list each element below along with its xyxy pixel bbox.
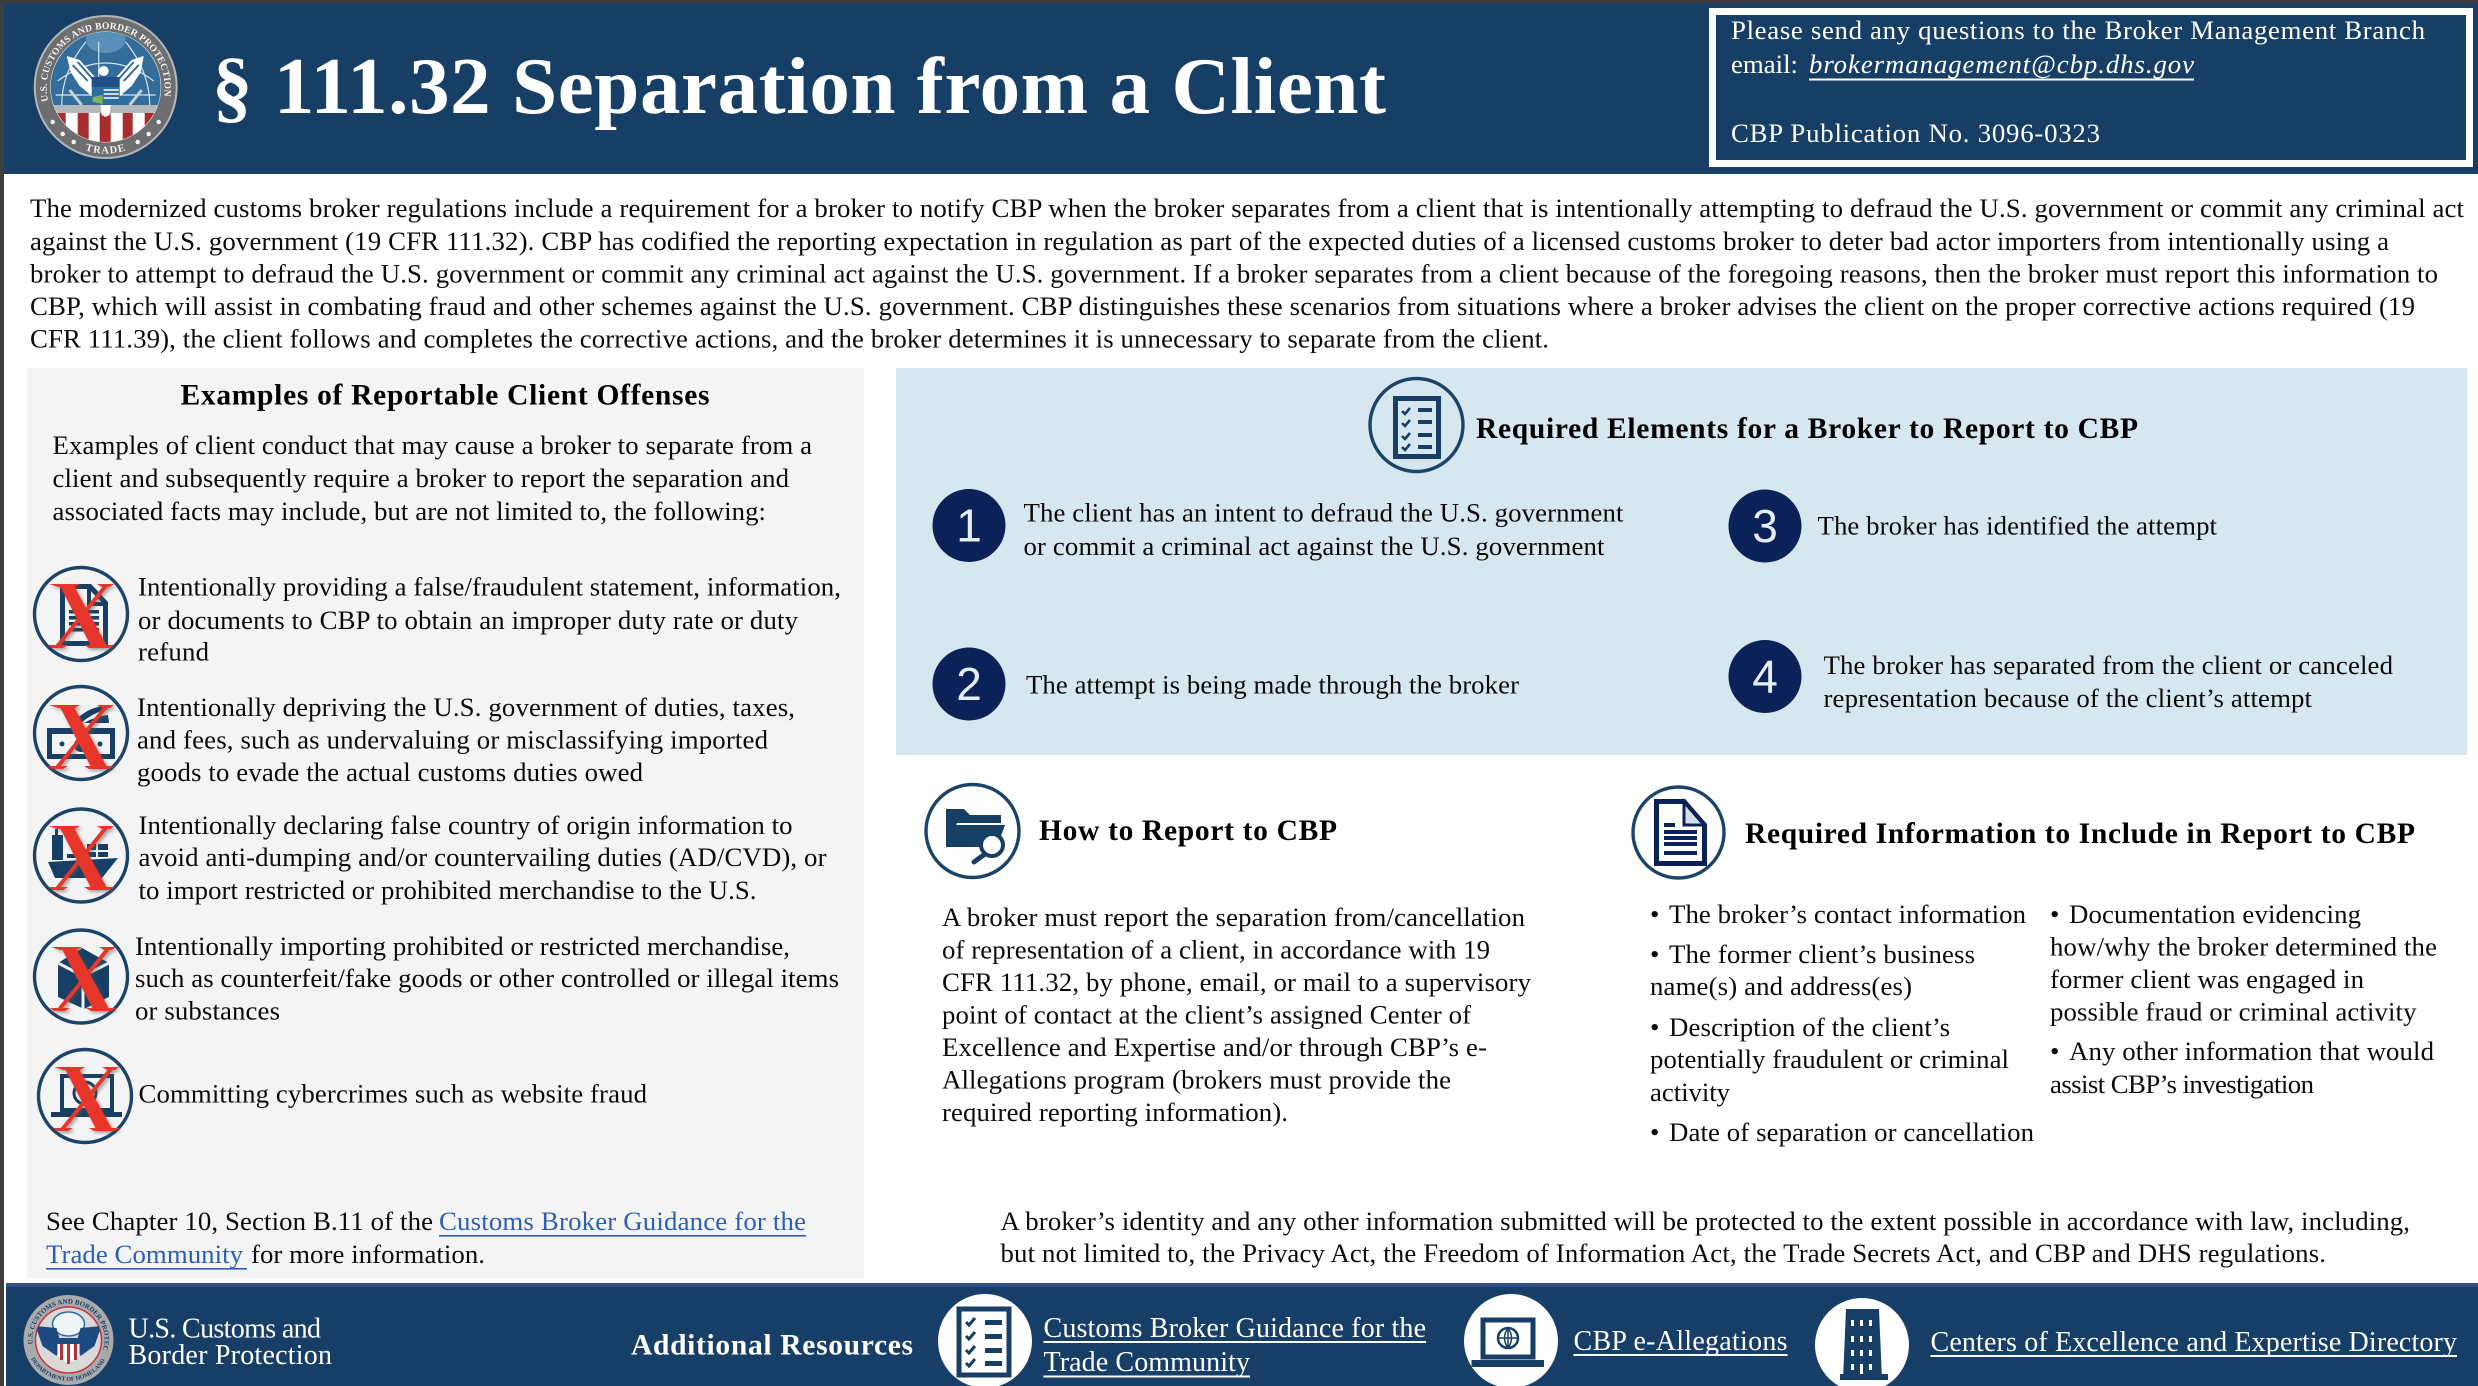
intro text: examples: client and subsequently require a broker to report the separation and (52, 463, 790, 493)
text: false statement: refund (138, 636, 210, 666)
text: depriving duties (137, 692, 795, 787)
text: prohibited merchandise (135, 931, 839, 1026)
text: false origin (138, 810, 827, 905)
element 2 text: The attempt is being made through the broker (1026, 670, 1519, 700)
contact box: brokermanagement@cbp.dhs.gov (1809, 49, 2194, 79)
element 1 text: The client has an intent to defraud the U.S. government (1024, 498, 1624, 528)
note: see chapter 10: Customs Broker Guidance for the (439, 1206, 806, 1236)
text: false statement (138, 572, 841, 666)
agency name (128, 1314, 332, 1371)
link: customs broker guidance: Trade Community (1044, 1347, 1250, 1378)
title: § 111.32 Separation from a Client (212, 41, 1386, 131)
intro text: examples (52, 430, 812, 526)
link: customs broker guidance: Customs Broker Guidance for the (1044, 1313, 1426, 1344)
list: column one: • (1650, 899, 1659, 929)
element 4 text: representation because of the client’s attempt (1824, 683, 2313, 713)
icon: checklist (1370, 378, 1463, 472)
icon: document (1633, 787, 1724, 878)
contact box: CBP Publication No. 3096-0323 (1731, 118, 2100, 148)
note: see chapter 10 (46, 1206, 806, 1270)
element 3 text: The broker has identified the attempt (1818, 510, 2218, 540)
icon: money crossed out (34, 686, 128, 780)
text: prohibited merchandise: or substances (135, 996, 280, 1026)
intro paragraph: broker to attempt to defraud the U.S. government or commit any criminal act against the U.S. government. If a broker separates from a client because of the foregoing reasons, then the broker must report this information to (30, 258, 2438, 288)
list: column one: • (1650, 1012, 1659, 1042)
link: centers of excellence: Centers of Excellence and Expertise Directory (1930, 1327, 2457, 1358)
heading: how to report: How to Report to CBP (1039, 815, 1337, 847)
privacy note: but not limited to, the Privacy Act, the Freedom of Information Act, the Trade Secrets Act, and CBP and DHS regulations. (1000, 1238, 2326, 1268)
paragraph: how to report: CFR 111.32, by phone, email, or mail to a supervisory (942, 967, 1532, 997)
note: see chapter 10: See Chapter 10, Section B.11 of the (46, 1206, 433, 1236)
number 1: 1 (956, 500, 982, 552)
list: column one: Description of the client’s (1669, 1012, 1950, 1042)
number 2 (932, 648, 1006, 720)
heading: required information: Required Information to Include in Report to CBP (1745, 818, 2415, 850)
text: cybercrimes: Committing cybercrimes such as website fraud (138, 1078, 648, 1108)
number 1 (932, 489, 1006, 562)
icon: checklist white (938, 1294, 1032, 1386)
seal ring text: DEPARTMENT OF HOMELAND SECURITY (31, 1356, 104, 1381)
heading: required elements: Required Elements for a Broker to Report to CBP (1476, 413, 2138, 445)
list: column two: how/why the broker determined the (2050, 932, 2437, 962)
element 1 text: or commit a criminal act against the U.S. government (1024, 531, 1605, 561)
list: column one (1650, 899, 2034, 1147)
intro paragraph (30, 193, 2465, 354)
paragraph: how to report: required reporting information). (942, 1097, 1288, 1127)
list: column two: former client was engaged in (2050, 964, 2364, 994)
privacy note: A broker’s identity and any other information submitted will be protected to the extent possible in accordance with law, including, (1000, 1206, 2410, 1236)
privacy note (1000, 1206, 2410, 1268)
list: column two: • (2050, 1036, 2059, 1066)
list: column one: The former client’s business (1669, 939, 1975, 969)
text: false origin: Intentionally declaring false country of origin information to (138, 810, 792, 840)
seal ring text: U.S. CUSTOMS AND BORDER PROTECTION (28, 1298, 110, 1350)
text: prohibited merchandise: Intentionally importing prohibited or restricted merchandise, (135, 931, 790, 961)
list: column one: Date of separation or cancellation (1669, 1117, 2034, 1147)
list: column two: assist CBP’s investigation (2050, 1069, 2314, 1099)
list: column one: potentially fraudulent or criminal (1650, 1044, 2009, 1074)
icon: false document crossed out (34, 568, 128, 660)
text: depriving duties: Intentionally depriving the U.S. government of duties, taxes, (137, 692, 795, 722)
intro paragraph: The modernized customs broker regulations include a requirement for a broker to notify CBP when the broker separates from a client that is intentionally attempting to defraud the U.S. government or commit any criminal act (30, 193, 2465, 223)
list: column one: The broker’s contact information (1669, 899, 2026, 929)
panel: examples of reportable client offenses (27, 368, 864, 1278)
panel: required elements (896, 368, 2467, 755)
icon: laptop crossed out (38, 1050, 132, 1142)
element 4 text (1824, 650, 2394, 713)
paragraph: how to report: of representation of a client, in accordance with 19 (942, 934, 1490, 964)
intro paragraph: against the U.S. government (19 CFR 111.32). CBP has codified the reporting expectation in regulation as part of the expected duties of a licensed customs broker to deter bad actor importers from intentionally using a (30, 226, 2389, 256)
paragraph: how to report: A broker must report the separation from/cancellation (942, 902, 1525, 932)
text: false statement: Intentionally providing a false/fraudulent statement, information, (138, 572, 841, 602)
element 1 text (1024, 498, 1624, 561)
icon: folder with magnifier (926, 784, 1019, 878)
seal ring text: U.S. CUSTOMS AND BORDER PROTECTION (40, 22, 171, 102)
section: how to report (926, 784, 1532, 1127)
agency name: Border Protection (128, 1340, 332, 1371)
icon: laptop white (1464, 1294, 1558, 1386)
text: depriving duties: goods to evade the actual customs duties owed (137, 757, 644, 787)
paragraph: how to report: Allegations program (brokers must provide the (942, 1064, 1451, 1094)
list: column one: • (1650, 939, 1659, 969)
contact box: Please send any questions to the Broker Management Branch (1731, 15, 2426, 45)
text: false statement: or documents to CBP to obtain an improper duty rate or duty (138, 605, 799, 635)
agency name: U.S. Customs and (128, 1314, 321, 1344)
list: column two: • (2050, 899, 2059, 929)
number 4: 4 (1752, 650, 1778, 702)
list: column one: activity (1650, 1077, 1731, 1107)
number 2: 2 (956, 658, 982, 710)
intro text: examples: associated facts may include, but are not limited to, the following: (52, 496, 766, 526)
paragraph: how to report: Excellence and Expertise and/or through CBP’s e- (942, 1032, 1487, 1062)
list: column two (2050, 899, 2437, 1099)
text: depriving duties: and fees, such as undervaluing or misclassifying imported (137, 724, 769, 754)
seal ring text: TRADE (86, 144, 125, 154)
intro paragraph: CFR 111.39), the client follows and completes the corrective actions, and the broker determines it is unnecessary to separate from the client. (30, 324, 1549, 354)
icon: DHS CBP seal (24, 1295, 114, 1385)
text: false origin: to import restricted or prohibited merchandise to the U.S. (138, 875, 756, 905)
note: see chapter 10: for more information. (251, 1239, 485, 1269)
element 4 text: The broker has separated from the client or canceled (1824, 650, 2394, 680)
list: column one: • (1650, 1117, 1659, 1147)
footer banner (6, 1283, 2478, 1386)
icon: CBP trade seal (34, 15, 178, 159)
link: e-allegations: CBP e-Allegations (1574, 1326, 1788, 1357)
heading: additional resources: Additional Resources (631, 1330, 913, 1362)
paragraph: how to report (942, 902, 1532, 1127)
intro paragraph: CBP, which will assist in combating fraud and other schemes against the U.S. government. CBP distinguishes these scenarios from situations where a broker advises the client on the proper corrective actions required (19 (30, 291, 2415, 321)
header banner (4, 3, 2478, 174)
text: false origin: avoid anti-dumping and/or countervailing duties (AD/CVD), or (138, 842, 827, 872)
icon: cargo ship crossed out (34, 809, 128, 902)
icon: building white (1815, 1298, 1909, 1386)
seal ring text (28, 1298, 110, 1381)
number 4 (1728, 640, 1802, 713)
eagle (66, 56, 95, 96)
section: required information (1633, 787, 2437, 1147)
number 3 (1728, 490, 1802, 562)
seal ring text (40, 22, 171, 154)
list: column two: Any other information that would (2069, 1036, 2435, 1066)
contact box: email: (1731, 49, 1798, 79)
icon: box crossed out (34, 930, 128, 1023)
list: column two: Documentation evidencing (2069, 899, 2361, 929)
list: column one: name(s) and address(es) (1650, 971, 1912, 1001)
number 3: 3 (1752, 500, 1778, 552)
contact box (1712, 12, 2470, 164)
link: customs broker guidance (1044, 1313, 1426, 1378)
intro text: examples: Examples of client conduct that may cause a broker to separate from a (52, 430, 812, 460)
text: prohibited merchandise: such as counterfeit/fake goods or other controlled or illegal items (135, 963, 839, 993)
note: see chapter 10: Trade Community (46, 1239, 244, 1269)
list: column two: possible fraud or criminal activity (2050, 996, 2417, 1026)
paragraph: how to report: point of contact at the client’s assigned Center of (942, 1000, 1471, 1030)
heading: examples: Examples of Reportable Client Offenses (180, 380, 710, 412)
